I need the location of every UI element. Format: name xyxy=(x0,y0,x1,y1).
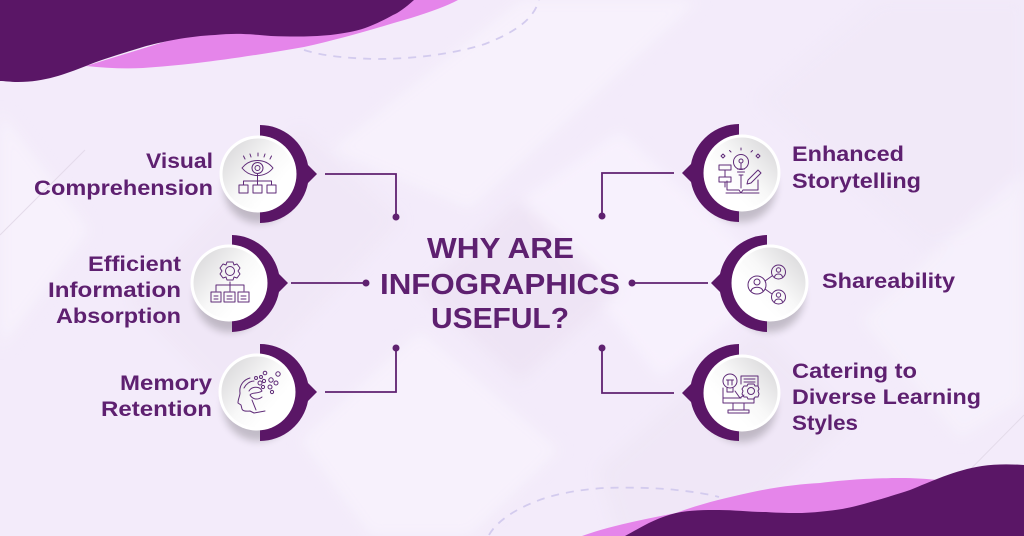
label: Diverse Learning xyxy=(792,385,981,409)
label: Absorption xyxy=(56,304,181,328)
node xyxy=(220,125,317,223)
central title: USEFUL? xyxy=(431,303,569,335)
connector xyxy=(325,174,400,220)
central title: WHY ARE xyxy=(427,233,574,265)
node xyxy=(218,344,317,441)
node xyxy=(682,344,780,442)
dashed arc bottom xyxy=(489,488,719,535)
icon: eye with folders xyxy=(239,153,276,193)
label xyxy=(48,252,181,328)
central title xyxy=(380,233,620,335)
node xyxy=(682,124,780,222)
connector xyxy=(628,280,708,286)
label: Retention xyxy=(101,397,212,421)
label: Information xyxy=(48,278,181,302)
label: Comprehension xyxy=(34,176,213,200)
label: Visual xyxy=(146,149,213,173)
icon: book with light bulb xyxy=(719,148,761,193)
bottom wave: dark purple layer xyxy=(625,464,1024,536)
connector xyxy=(291,280,370,286)
label: Enhanced xyxy=(792,142,904,166)
background xyxy=(0,150,1024,468)
label xyxy=(34,149,213,200)
label xyxy=(101,371,212,421)
top wave: pink layer xyxy=(86,0,458,68)
label xyxy=(792,142,921,193)
item: Visual Comprehension xyxy=(34,125,400,223)
connector xyxy=(598,173,674,220)
item: Shareability xyxy=(628,235,955,332)
item: Enhanced Storytelling xyxy=(598,124,921,222)
item: Catering to Diverse Learning Styles xyxy=(598,344,981,442)
item: Memory Retention xyxy=(101,344,400,441)
node xyxy=(711,235,808,332)
central title: INFOGRAPHICS xyxy=(380,269,620,301)
icon: gear with documents xyxy=(211,262,249,302)
label: Styles xyxy=(792,411,858,435)
connector xyxy=(598,344,674,393)
label: Memory xyxy=(120,371,212,395)
connector xyxy=(325,344,400,392)
node xyxy=(190,235,288,332)
label xyxy=(792,359,981,435)
icon: monitor with bulb and gear xyxy=(723,374,759,413)
item: Efficient Information Absorption xyxy=(48,235,370,332)
icon: head with memory dots xyxy=(238,371,280,413)
label: Shareability xyxy=(822,269,955,293)
label: Storytelling xyxy=(792,169,921,193)
bottom wave: pink layer xyxy=(582,478,938,536)
label: Efficient xyxy=(88,252,181,276)
dashed arc top xyxy=(304,0,539,59)
top wave: dark purple layer xyxy=(0,0,414,82)
icon: share network of people xyxy=(748,265,786,304)
label: Catering to xyxy=(792,359,917,383)
